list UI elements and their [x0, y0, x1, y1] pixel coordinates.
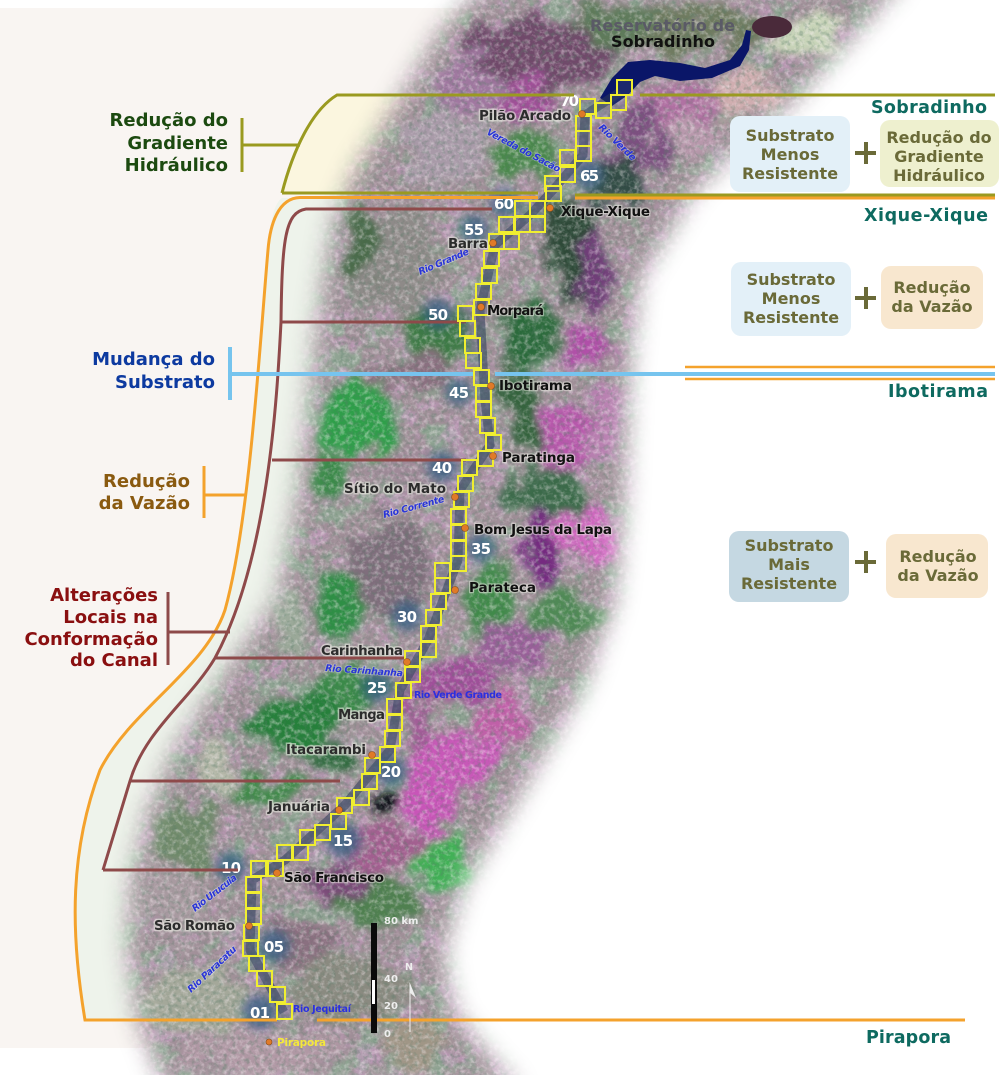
- city labels: Manga: [338, 707, 385, 723]
- formula: Sobradinho to Xique-Xique: Gradiente: [894, 147, 984, 166]
- formula: Sobradinho to Xique-Xique: Hidráulico: [893, 166, 985, 185]
- scale bar: 40: [384, 974, 398, 985]
- right location labels: Xique-Xique: [864, 206, 988, 226]
- olive boundary: Sobradinho zone: [282, 95, 995, 195]
- scale bar: [371, 916, 418, 1040]
- segment numbers: 70: [560, 92, 579, 110]
- heading: local channel changes: do Canal: [70, 650, 158, 671]
- zone: hydraulic gradient reduction fill: [282, 95, 470, 193]
- segment numbers: 15: [333, 832, 353, 850]
- heading: gradient reduction: Gradiente: [127, 133, 228, 154]
- segment numbers: 01: [250, 1004, 270, 1022]
- formula: Xique-Xique to Ibotirama: da Vazão: [891, 297, 973, 316]
- river labels: Rio Verde Grande: [414, 690, 502, 701]
- city labels: Pirapora: [277, 1037, 326, 1049]
- city location dots: [246, 110, 586, 1045]
- city labels: Itacarambi: [286, 742, 366, 758]
- number badge backgrounds: [216, 160, 604, 1029]
- reservoir title: Reservatório de: [590, 16, 735, 35]
- heading: local channel changes: Locais na: [63, 607, 158, 628]
- city labels: Bom Jesus da Lapa: [474, 522, 612, 538]
- river labels: Vereda do Sacão: [485, 127, 563, 175]
- bracket: substrate: [228, 347, 232, 400]
- scale bar: 80 km: [384, 916, 418, 927]
- segment numbers: 55: [464, 221, 484, 239]
- formula: Sobradinho to Xique-Xique: Resistente: [742, 164, 838, 183]
- formula: Ibotirama to Pirapora: Substrato: [745, 536, 833, 555]
- formula: Sobradinho to Xique-Xique: Menos: [761, 145, 819, 164]
- segment numbers: 30: [397, 608, 417, 626]
- heading: discharge reduction: Redução: [103, 471, 190, 492]
- formula: Xique-Xique to Ibotirama: Resistente: [743, 308, 839, 327]
- formula: Ibotirama to Pirapora: da Vazão: [897, 566, 979, 585]
- city labels: Morpará: [487, 303, 544, 319]
- heading: discharge reduction: da Vazão: [99, 493, 190, 514]
- formula: Xique-Xique to Ibotirama: Redução: [893, 278, 971, 297]
- formula: Sobradinho to Xique-Xique: [730, 116, 999, 192]
- heading: gradient reduction: Hidráulico: [125, 155, 228, 176]
- city labels: São Romão: [154, 918, 235, 934]
- formula: Sobradinho to Xique-Xique: Redução do: [886, 128, 992, 147]
- heading: gradient reduction: Redução do: [110, 110, 228, 131]
- heading: local channel changes: Conformação: [24, 629, 158, 650]
- segment numbers: 45: [449, 384, 469, 402]
- river labels: Rio Paracatu: [186, 944, 239, 995]
- city labels: Xique-Xique: [561, 204, 650, 220]
- formula: Sobradinho to Xique-Xique: Substrato: [746, 126, 834, 145]
- city labels: Sítio do Mato: [344, 481, 446, 497]
- bracket: channel: [168, 592, 230, 665]
- Sobradinho reservoir: [600, 16, 792, 106]
- city labels: [154, 108, 650, 1049]
- formula: Ibotirama to Pirapora: Mais: [768, 555, 810, 574]
- city labels: Barra: [448, 236, 488, 252]
- river dark corridor: [250, 92, 620, 1012]
- heading: substrate change: Mudança do: [92, 349, 215, 370]
- formula: Ibotirama to Pirapora: Redução: [899, 547, 977, 566]
- formula: Ibotirama to Pirapora: Resistente: [741, 574, 837, 593]
- river labels: Rio Carinhanha: [325, 663, 403, 679]
- city labels: São Francisco: [284, 870, 384, 886]
- zone: pale interior of lower section: [75, 198, 400, 1020]
- reservoir title: Sobradinho: [611, 32, 715, 51]
- segment numbers: 65: [580, 167, 599, 185]
- river labels: Rio Urucuia: [190, 872, 239, 914]
- city labels: Paratinga: [502, 450, 575, 466]
- river labels: Rio Grande: [417, 246, 471, 278]
- heading: substrate change: Substrato: [115, 372, 215, 393]
- segment numbers: 50: [428, 306, 448, 324]
- brackets for left headings: [168, 118, 300, 665]
- segment numbers: 35: [471, 540, 491, 558]
- north arrow: N: [405, 962, 413, 973]
- city labels: Januária: [267, 799, 330, 815]
- blue line: substrate change: [230, 372, 995, 376]
- formula: Xique-Xique to Ibotirama: Substrato: [747, 270, 835, 289]
- scale bar: 20: [384, 1001, 398, 1012]
- city labels: Parateca: [469, 580, 536, 596]
- bracket: gradient: [242, 118, 300, 172]
- right location labels: Ibotirama: [888, 382, 988, 402]
- segment numbers: 05: [264, 938, 284, 956]
- brown boundary: local channel changes: [103, 209, 492, 870]
- left off-white panel: [0, 8, 500, 1048]
- orange lines: Ibotirama: [685, 367, 995, 379]
- river labels: [186, 122, 638, 1015]
- right location labels: [864, 98, 988, 1048]
- city labels: Pilão Arcado: [479, 108, 571, 124]
- segment numbers: 60: [494, 195, 514, 213]
- bracket: discharge: [204, 466, 247, 518]
- city labels: Ibotirama: [499, 378, 572, 394]
- yellow river segment grid: [243, 80, 632, 1019]
- segment numbers: 25: [367, 679, 387, 697]
- formula: Xique-Xique to Ibotirama: Menos: [762, 289, 820, 308]
- formula: Xique-Xique to Ibotirama: [731, 262, 983, 336]
- right location labels: Sobradinho: [871, 98, 987, 118]
- north arrow: [405, 962, 416, 1032]
- scale bar: 0: [384, 1029, 391, 1040]
- segment numbers: 40: [432, 459, 452, 477]
- zone boundary lines: [75, 95, 995, 1020]
- satellite map band: [111, 0, 906, 1075]
- river labels: Rio Jequitaí: [293, 1004, 352, 1015]
- right location labels: Pirapora: [866, 1028, 951, 1048]
- formula: Ibotirama to Pirapora: [729, 531, 988, 602]
- river labels: Rio Verde: [596, 122, 638, 164]
- heading: local channel changes: Alterações: [50, 585, 158, 606]
- segment numbers: [221, 92, 599, 1022]
- orange boundary: Xique-Xique to Pirapora: [75, 198, 995, 1020]
- city labels: Carinhanha: [321, 643, 403, 659]
- segment numbers: 20: [381, 763, 401, 781]
- segment numbers: 10: [221, 859, 241, 877]
- left headings: [24, 110, 228, 671]
- reservoir title: [590, 16, 735, 51]
- river labels: Rio Corrente: [382, 494, 446, 521]
